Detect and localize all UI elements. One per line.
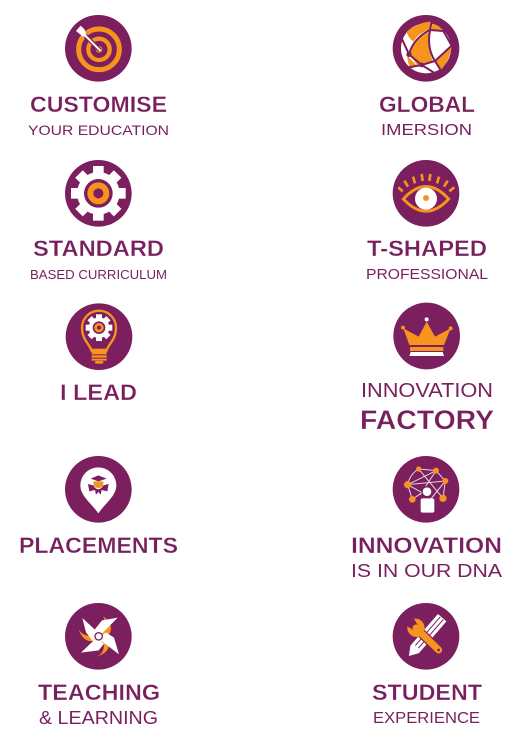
icon: pinwheel — [65, 603, 132, 670]
heading: innovation factory — [360, 380, 494, 435]
icon: location pin with graduate — [65, 456, 132, 523]
icon: wrench and pencil — [393, 603, 459, 670]
heading: standard: BASED CURRICULUM — [30, 268, 167, 282]
heading: teaching and learning: & LEARNING — [39, 708, 158, 728]
heading: innovation is in our dna: IS IN OUR DNA — [351, 561, 502, 581]
icon: global network globe — [393, 15, 459, 82]
heading: customise: YOUR EDUCATION — [28, 122, 169, 138]
heading: standard — [30, 236, 167, 282]
icon: eye — [393, 160, 459, 227]
heading: t-shaped: PROFESSIONAL — [366, 266, 488, 283]
heading: innovation factory: INNOVATION — [361, 380, 493, 402]
heading: innovation is in our dna — [351, 533, 502, 581]
heading: global: IMERSION — [381, 122, 472, 139]
icon: network and person — [393, 456, 459, 523]
icon: crown — [393, 303, 460, 369]
heading: t-shaped — [366, 236, 488, 283]
heading: global — [379, 92, 475, 139]
heading: placements: PLACEMENTS — [19, 533, 178, 558]
heading: standard: STANDARD — [33, 236, 164, 261]
heading: teaching and learning: TEACHING — [38, 680, 160, 705]
heading: teaching and learning — [38, 680, 160, 728]
heading: innovation is in our dna: INNOVATION — [351, 533, 502, 558]
heading: customise: CUSTOMISE — [30, 92, 167, 117]
heading: customise — [28, 92, 169, 138]
heading: t-shaped: T-SHAPED — [367, 236, 487, 261]
heading: student experience: EXPERIENCE — [373, 710, 480, 727]
heading: student experience: STUDENT — [372, 680, 483, 705]
icon: gear — [65, 160, 132, 227]
heading: student experience — [372, 680, 483, 727]
icon: target with arrow — [65, 15, 132, 82]
heading: global: GLOBAL — [379, 92, 475, 117]
heading: i lead: I LEAD — [60, 380, 137, 405]
icon: light bulb with gear — [66, 303, 132, 370]
heading: innovation factory: FACTORY — [360, 405, 494, 435]
